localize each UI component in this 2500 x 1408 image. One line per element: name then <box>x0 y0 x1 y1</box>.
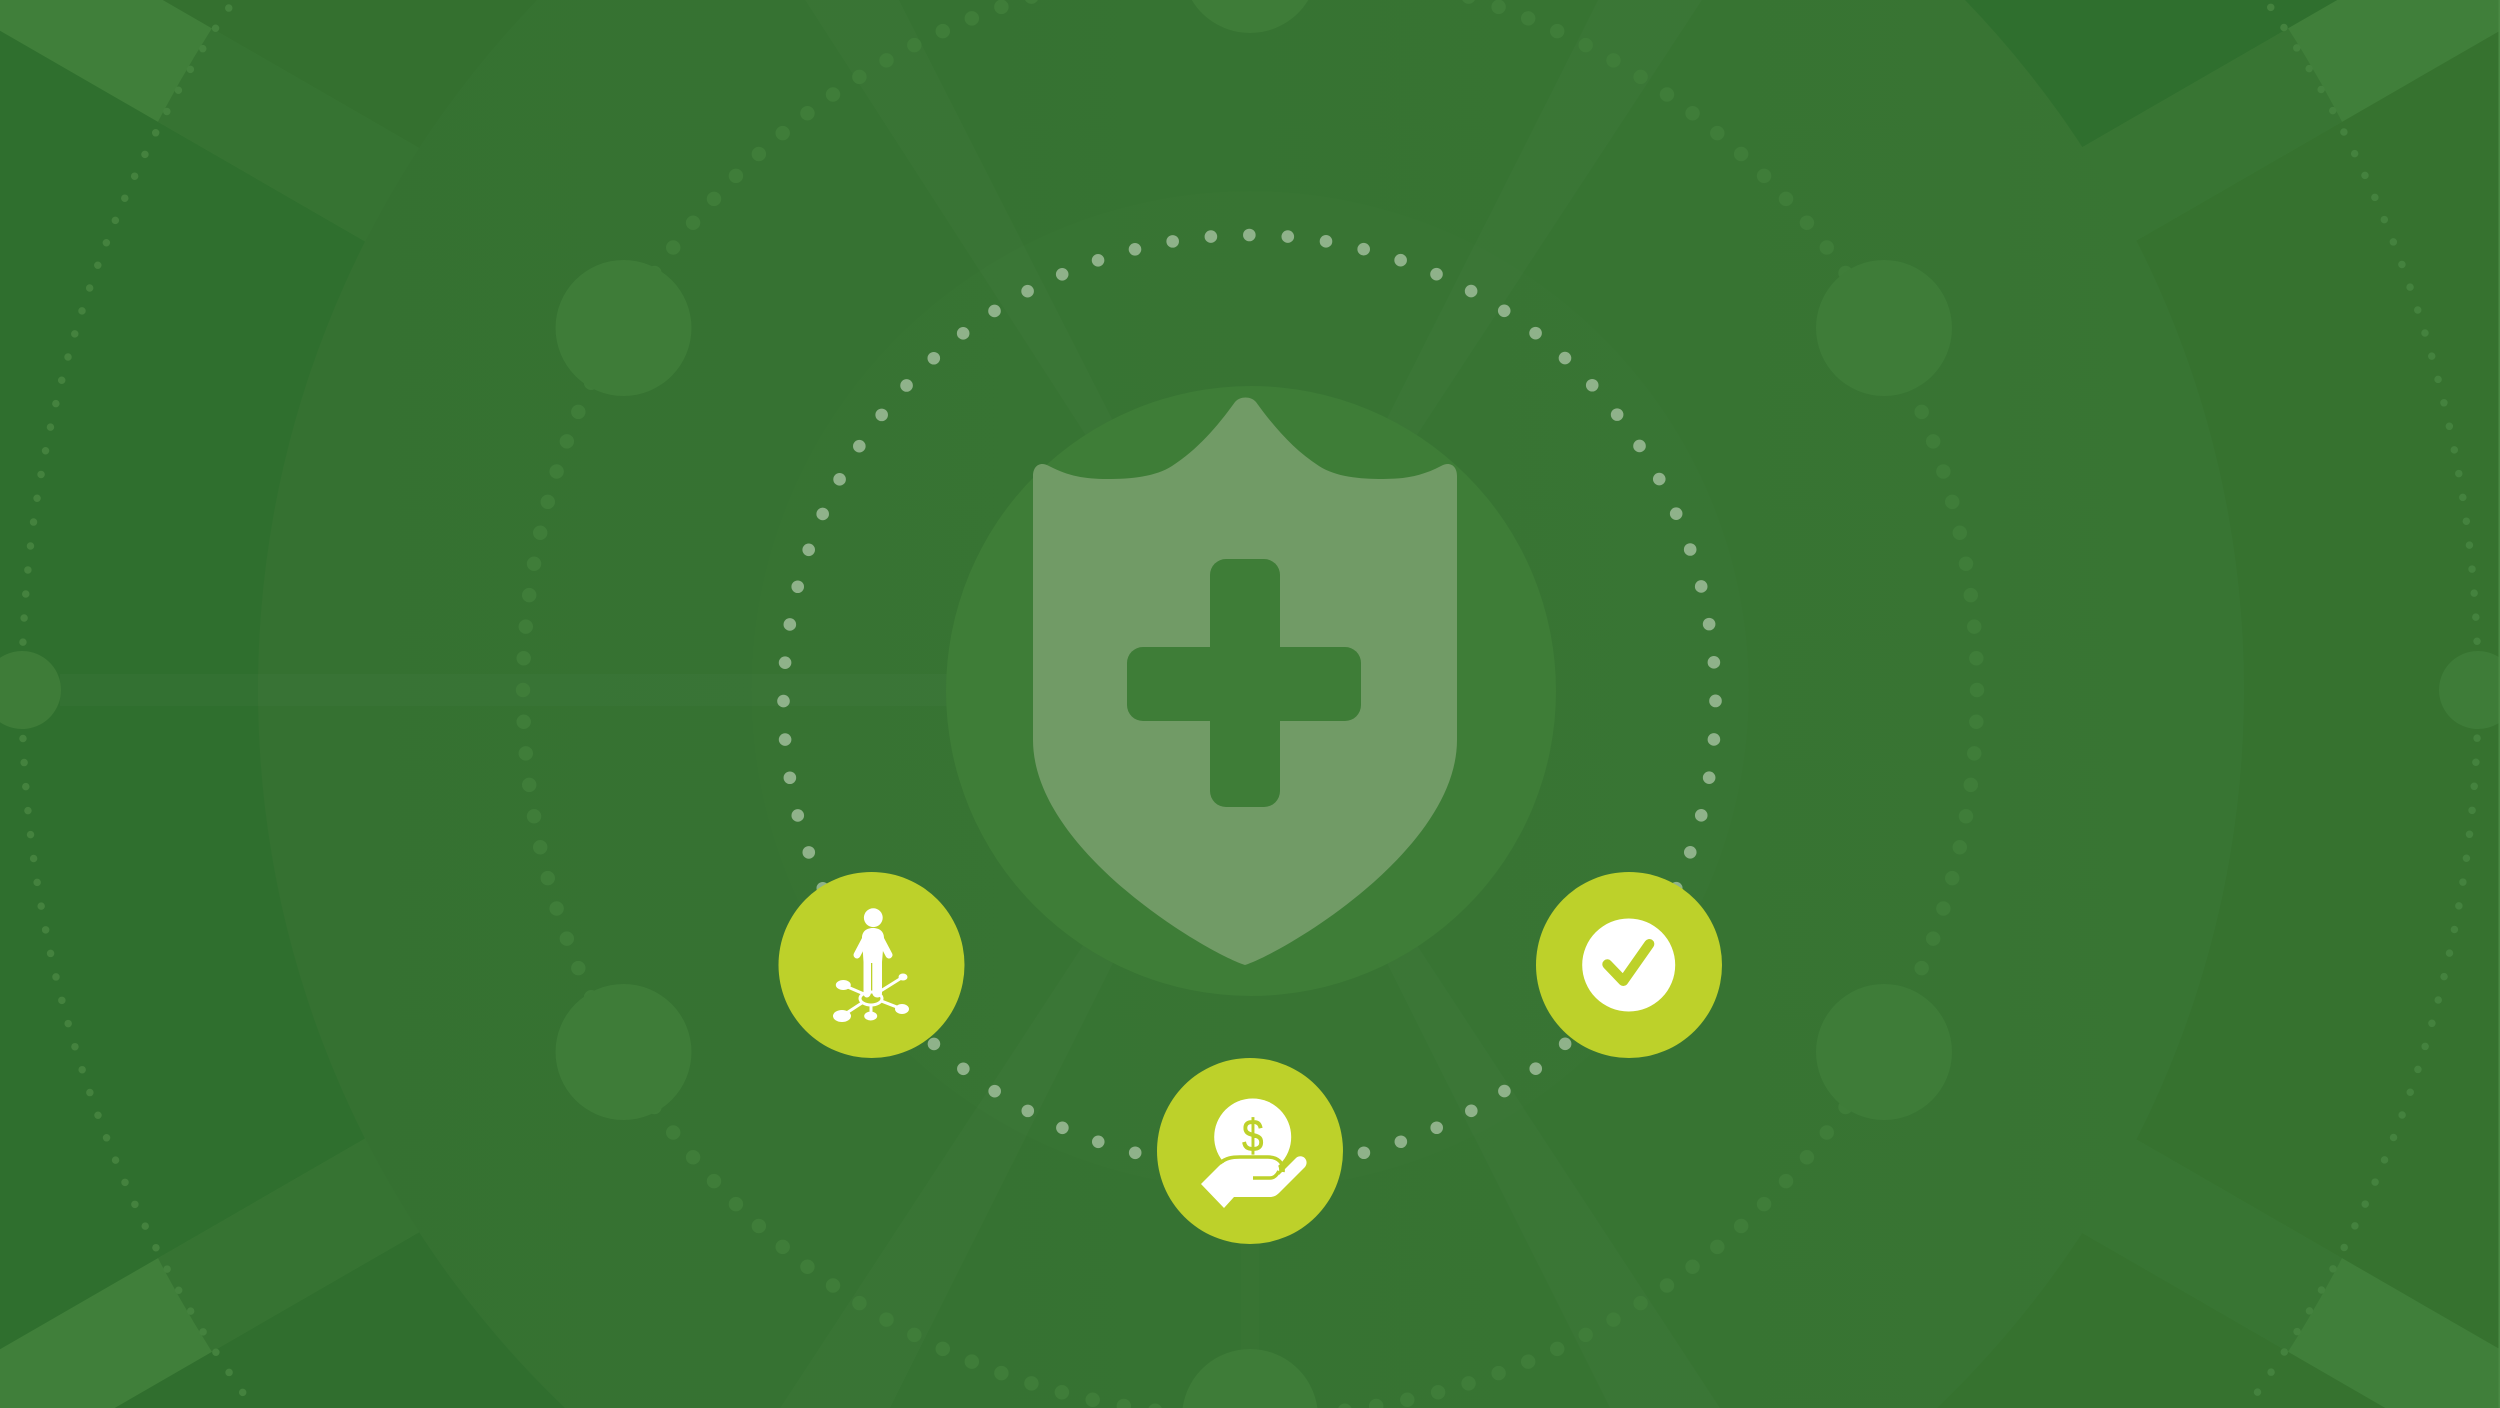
badge: hand holding coin <box>1157 1058 1343 1244</box>
icon: shield with medical cross <box>1033 398 1457 965</box>
faint radial beams <box>60 0 1720 1408</box>
badge: hand holding coin: $ <box>1242 1110 1263 1161</box>
inner dotted ring <box>784 235 1716 1167</box>
large background disc <box>258 0 2244 1408</box>
middle dotted ring <box>523 0 1977 1408</box>
faint inner disc <box>751 191 1749 1189</box>
right edge sliver <box>2498 0 2500 1408</box>
central disc <box>946 386 1556 996</box>
badge: person with network <box>778 872 964 1058</box>
badge: checkmark <box>1536 872 1722 1058</box>
